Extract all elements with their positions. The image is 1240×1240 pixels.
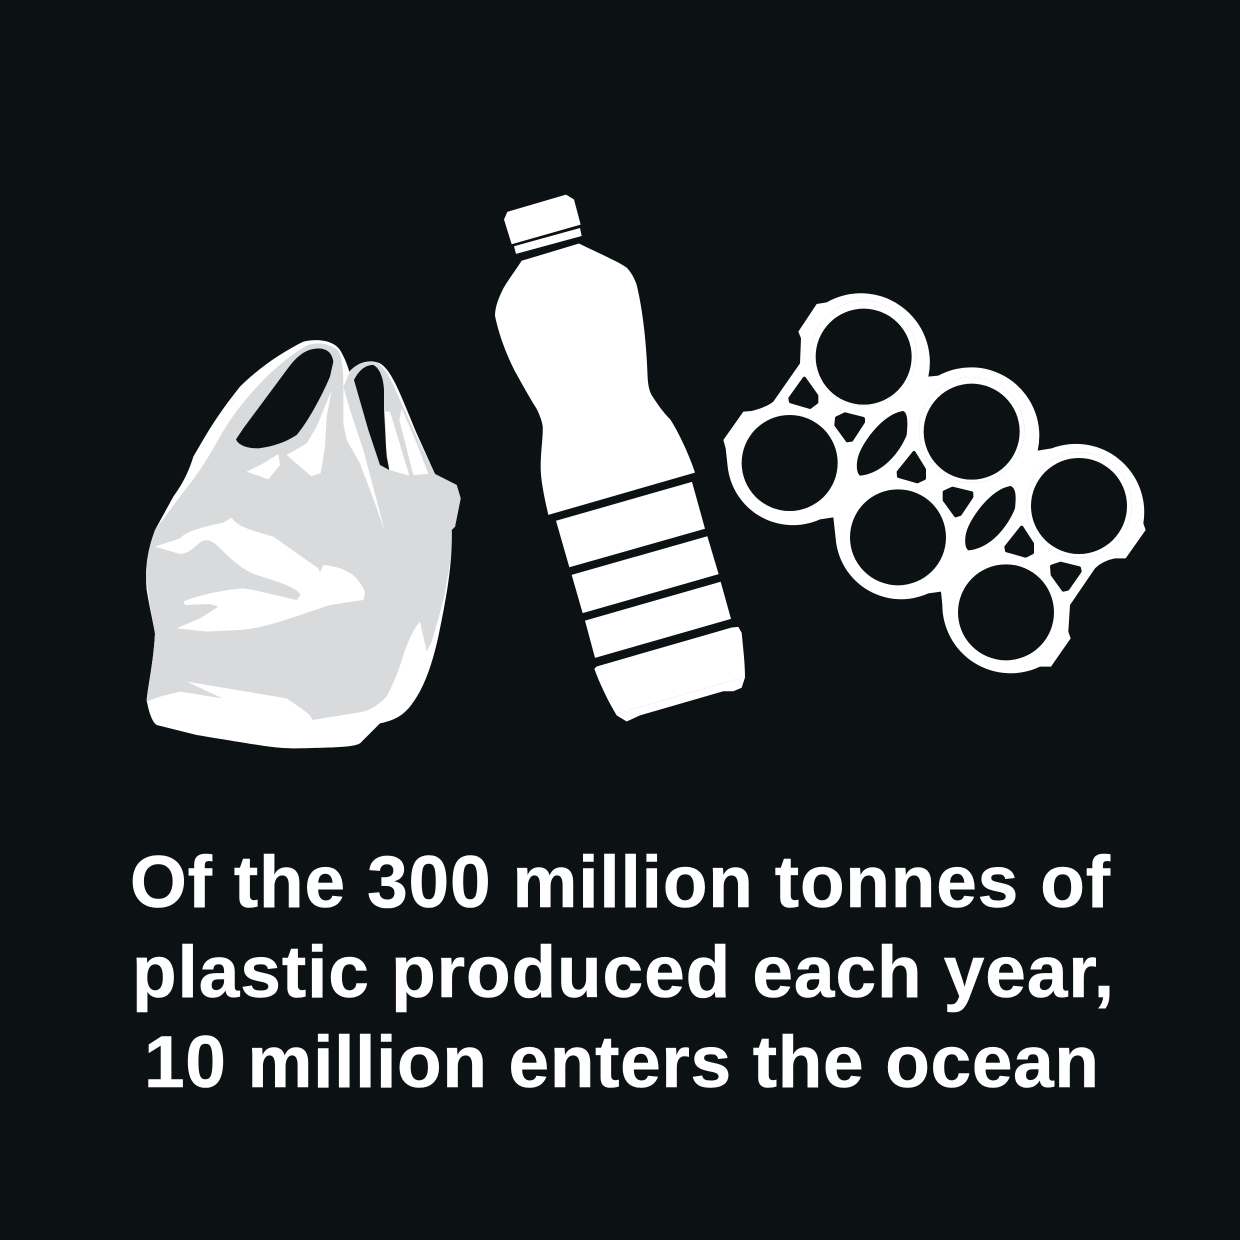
bottle label bands [556, 482, 705, 567]
bottle upper body [495, 244, 695, 515]
headline text: Of the 300 million tonnes of [130, 842, 1111, 923]
ring seam lines [811, 301, 1132, 558]
bag handle hole right [354, 365, 389, 470]
bag white silhouette [146, 340, 461, 748]
bag grey body [146, 344, 461, 720]
rings white silhouette [723, 293, 1146, 673]
bottle cap [504, 195, 581, 244]
headline text: plastic produced each year, [132, 932, 1114, 1013]
icon: plastic bottle [495, 195, 745, 722]
bottle neck ring [514, 228, 582, 254]
bottle base [594, 627, 745, 722]
oval gaps [857, 411, 1016, 550]
six can holes [742, 309, 1127, 660]
headline text: 10 million enters the ocean [144, 1022, 1099, 1103]
bag handle highlights [247, 387, 428, 532]
bag handle hole left [236, 349, 333, 448]
bag seam lines [175, 465, 377, 560]
gaps between rings [790, 378, 1080, 590]
bag highlight: folds [155, 518, 365, 632]
icon: plastic bag [146, 340, 461, 748]
headline text [130, 842, 1114, 1103]
icon: six-pack rings [723, 293, 1146, 673]
